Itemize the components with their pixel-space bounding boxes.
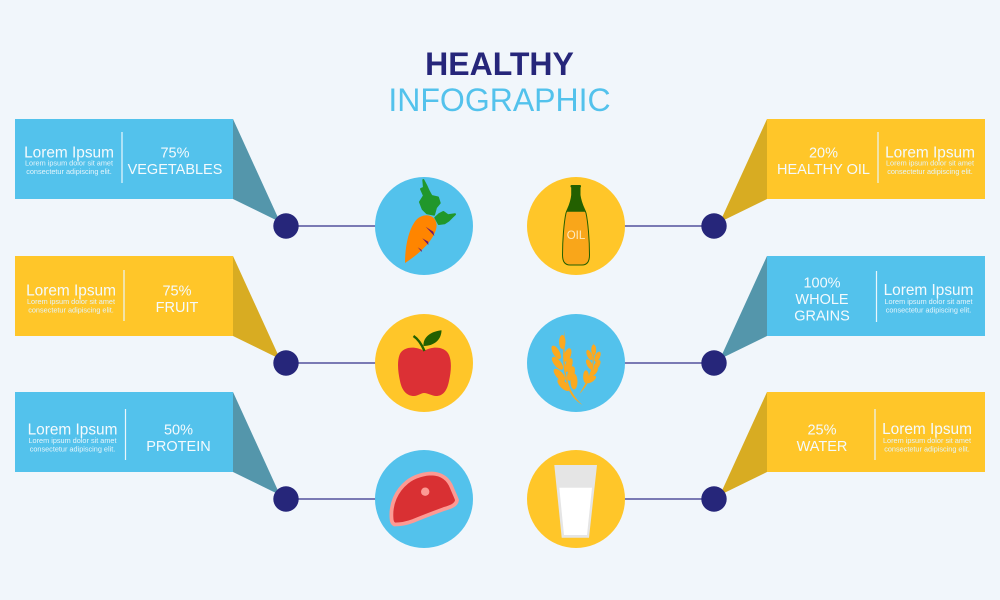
- panel: protein: PROTEIN: [146, 439, 211, 455]
- panel: healthy oil: Lorem ipsum dolor sit amet: [886, 158, 974, 168]
- connector: water: [624, 486, 727, 512]
- panel: healthy oil: Lorem Ipsum: [885, 144, 975, 162]
- panel: whole grains: WHOLE: [795, 292, 849, 308]
- panel: whole grains: [720, 256, 985, 359]
- icon: apple: [375, 314, 473, 412]
- connector: fruit: [273, 350, 376, 376]
- icon: carrot: [375, 177, 473, 275]
- panel: water: Lorem ipsum dolor sit amet: [883, 436, 971, 445]
- panel: healthy oil: [720, 119, 985, 222]
- icon: meat: [375, 450, 473, 548]
- panel: fruit: Lorem ipsum dolor sit amet: [27, 297, 115, 306]
- panel: vegetables: Lorem Ipsum: [24, 144, 114, 162]
- panel: water: WATER: [797, 439, 847, 455]
- panel: vegetables: VEGETABLES: [128, 162, 222, 178]
- icon: glass of milk: [527, 450, 625, 548]
- panel: protein: Lorem ipsum dolor sit amet: [28, 436, 117, 445]
- panel: fruit: [15, 256, 280, 359]
- icon: oil bottle: OIL: [567, 230, 586, 242]
- connector: protein: [273, 486, 376, 512]
- panel: whole grains: Lorem ipsum dolor sit amet: [884, 297, 973, 306]
- panel: fruit: consectetur adipiscing elit.: [28, 306, 114, 314]
- connector: whole grains: [624, 350, 727, 376]
- panel: whole grains: GRAINS: [794, 308, 850, 324]
- panel: fruit: FRUIT: [156, 300, 198, 316]
- panel: protein: 50%: [164, 422, 193, 438]
- panel: vegetables: Lorem ipsum dolor sit amet: [25, 158, 113, 168]
- icon: wheat: [527, 314, 625, 412]
- panel: vegetables: consectetur adipiscing elit.: [26, 167, 112, 176]
- panel: water: 25%: [807, 422, 837, 438]
- panel: whole grains: consectetur adipiscing elit.: [886, 306, 971, 314]
- panel: protein: [15, 392, 280, 495]
- connector: healthy oil: [624, 213, 727, 239]
- connector: vegetables: [273, 213, 376, 239]
- panel: water: Lorem Ipsum: [882, 421, 972, 438]
- panel: healthy oil: HEALTHY OIL: [777, 162, 870, 178]
- panel: vegetables: [15, 119, 280, 222]
- panel: protein: Lorem Ipsum: [28, 422, 117, 438]
- panel: healthy oil: 20%: [809, 146, 838, 162]
- panel: water: [720, 392, 985, 495]
- panel: fruit: 75%: [162, 284, 192, 300]
- panel: fruit: Lorem Ipsum: [26, 282, 116, 300]
- panel: whole grains: Lorem Ipsum: [884, 282, 973, 299]
- panel: water: consectetur adipiscing elit.: [884, 444, 970, 454]
- title: [388, 46, 611, 118]
- panel: vegetables: 75%: [160, 146, 190, 162]
- title: INFOGRAPHIC: [388, 82, 611, 118]
- panel: whole grains: 100%: [803, 276, 841, 292]
- title: HEALTHY: [425, 46, 574, 82]
- icon: oil bottle: [527, 177, 625, 275]
- panel: healthy oil: consectetur adipiscing elit.: [887, 167, 973, 176]
- panel: protein: consectetur adipiscing elit.: [30, 444, 115, 454]
